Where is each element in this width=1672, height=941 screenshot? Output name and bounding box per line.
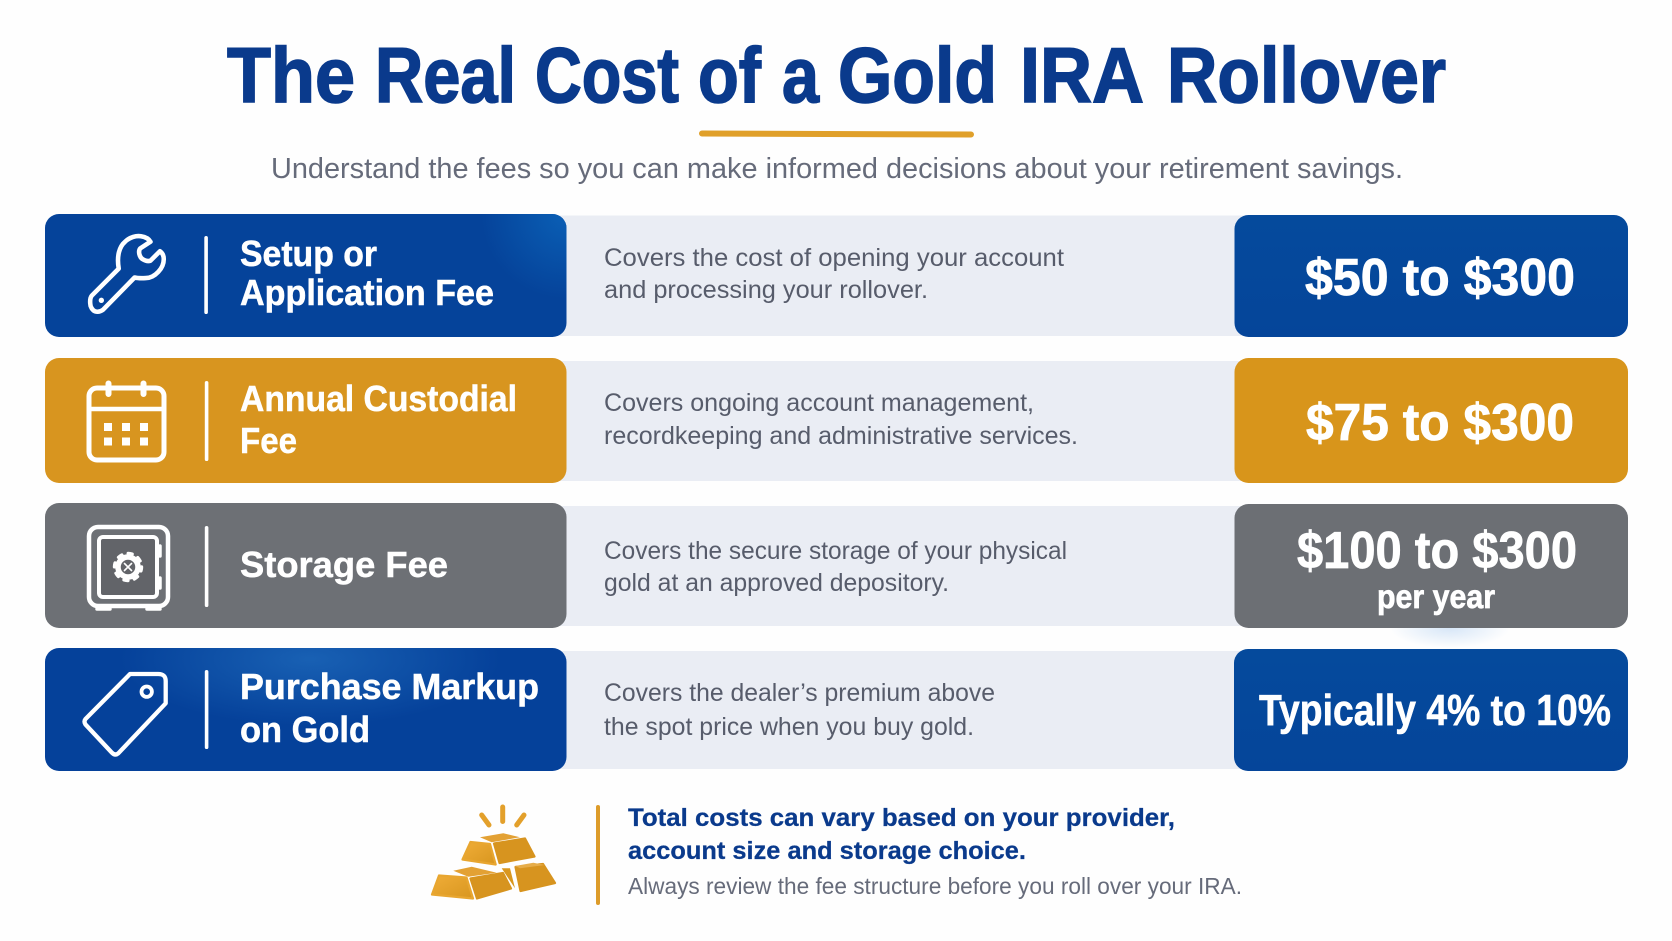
title: Rollover: [1167, 31, 1446, 119]
fee description: [604, 537, 1067, 597]
fee description: Covers the secure storage of your physical: [604, 537, 1067, 565]
fee name: Application Fee: [240, 272, 494, 313]
value panel: [1234, 649, 1628, 771]
fee value: $75 to $300: [1306, 394, 1574, 452]
value panel: [1234, 215, 1628, 337]
footer divider: [596, 805, 600, 905]
icon: safe: [89, 527, 168, 609]
title: Real: [375, 31, 516, 119]
title: a: [782, 31, 820, 119]
footer note: Total costs can vary based on your provider,: [628, 804, 1175, 832]
divider: [205, 670, 208, 749]
fee description: [604, 389, 1078, 450]
label panel: [45, 648, 566, 771]
fee name: [240, 233, 494, 313]
fee name: Annual Custodial: [240, 378, 517, 419]
description background: [550, 216, 1250, 336]
icon: gold bars: [432, 807, 555, 898]
title underline: [702, 134, 971, 135]
fee description: [604, 679, 995, 741]
label panel: [45, 358, 566, 483]
divider: [205, 381, 208, 461]
fee description: and processing your rollover.: [604, 276, 928, 304]
row: purchase markup on gold: [45, 648, 1628, 771]
fee name: [240, 378, 517, 461]
fee description: recordkeeping and administrative services.: [604, 422, 1078, 450]
title: [227, 31, 1446, 119]
row: annual custodial fee: [45, 358, 1628, 483]
value panel: [1234, 358, 1628, 483]
glow under value panel: [1390, 608, 1510, 648]
title: The: [227, 31, 355, 119]
title: IRA: [1020, 31, 1144, 119]
fee description: Covers ongoing account management,: [604, 389, 1034, 417]
fee description: Covers the dealer’s premium above: [604, 679, 995, 707]
divider: [204, 236, 208, 314]
icon: calendar: [89, 384, 164, 460]
icon: wrench: [90, 236, 164, 312]
fee name: [240, 666, 539, 750]
footer note: account size and storage choice.: [628, 837, 1026, 865]
footer note: Always review the fee structure before you roll over your IRA.: [628, 873, 1242, 899]
fee description: Covers the cost of opening your account: [604, 244, 1064, 272]
fee value: Typically 4% to 10%: [1259, 686, 1611, 735]
title: Gold: [838, 31, 997, 119]
fee name: Fee: [240, 420, 297, 461]
row: storage fee: [45, 503, 1628, 648]
icon: price tag: [84, 674, 166, 754]
divider: [205, 526, 208, 607]
fee description: gold at an approved depository.: [604, 569, 949, 597]
fee description: the spot price when you buy gold.: [604, 713, 974, 741]
label panel: [45, 214, 566, 337]
fee value: per year: [1377, 578, 1495, 615]
fee name: Storage Fee: [240, 544, 448, 585]
title: Cost: [535, 31, 679, 119]
label panel: [45, 503, 566, 628]
footer note: [628, 804, 1242, 899]
description background: [550, 651, 1250, 769]
subtitle: Understand the fees so you can make informed decisions about your retirement savings.: [271, 153, 1403, 185]
fee name: Setup or: [240, 233, 377, 274]
description background: [550, 506, 1250, 626]
description background: [550, 361, 1250, 481]
fee description: [604, 244, 1064, 304]
title: of: [698, 31, 762, 119]
fee value: [1297, 522, 1577, 615]
fee value: $50 to $300: [1305, 249, 1575, 307]
fee name: on Gold: [240, 709, 370, 750]
row: setup or application fee: [45, 214, 1628, 337]
fee name: Purchase Markup: [240, 666, 539, 707]
value panel: [1234, 504, 1628, 628]
fee value: $100 to $300: [1297, 522, 1577, 580]
